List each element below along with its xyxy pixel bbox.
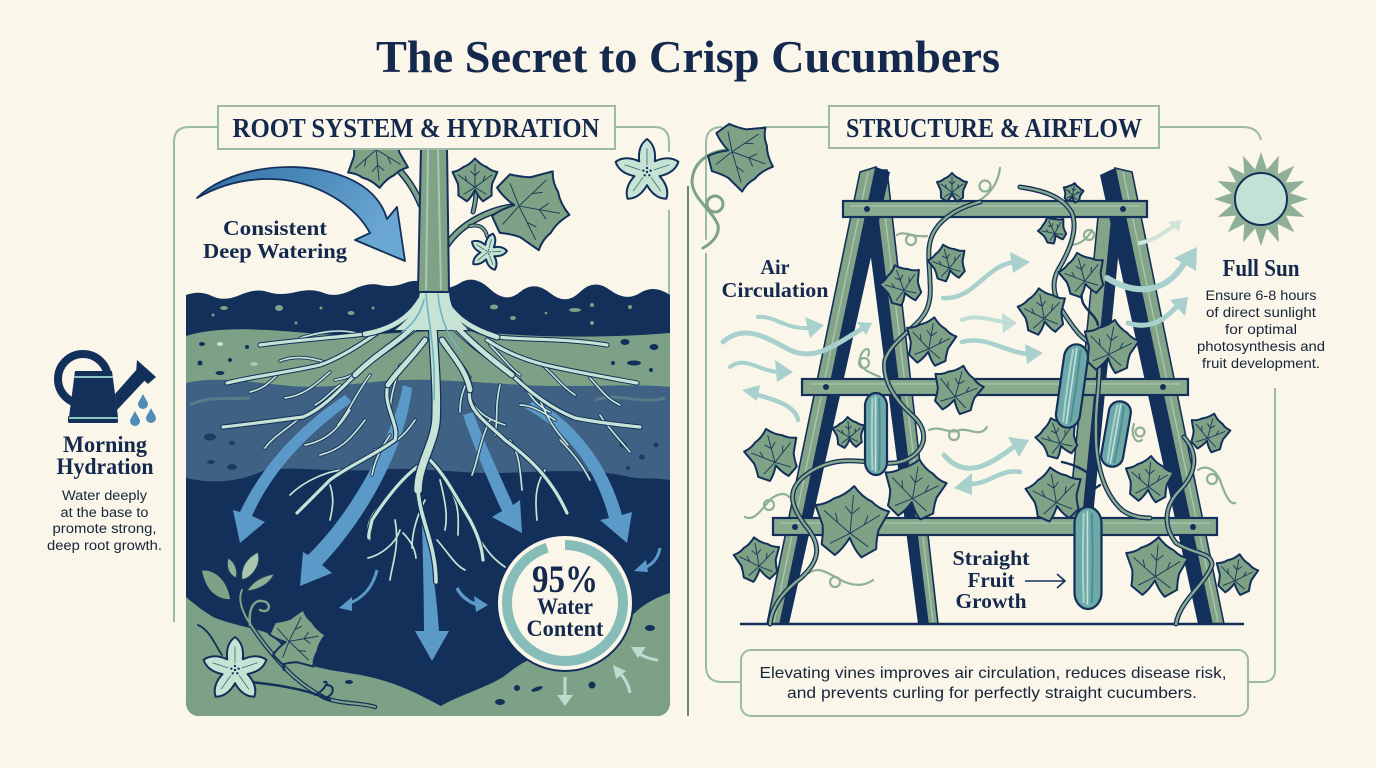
taproot — [395, 292, 468, 582]
main stem — [418, 148, 449, 292]
cucumber — [1054, 343, 1090, 429]
left A-frame outer leg — [780, 167, 890, 624]
heading: full sun: Full Sun — [1222, 256, 1300, 282]
stem highlight — [426, 150, 441, 290]
leaf — [1062, 181, 1085, 204]
leaf — [1212, 551, 1260, 597]
label: straight fruit growth: Growth — [956, 589, 1027, 613]
label: straight fruit growth: Straight — [952, 546, 1030, 570]
vine outlines — [770, 187, 1212, 624]
text: full sun description: fruit development. — [1202, 355, 1320, 371]
air arrow — [954, 471, 1020, 495]
air arrow — [730, 360, 793, 382]
corner vine — [692, 150, 727, 248]
lower soil stones — [345, 625, 655, 705]
leaf — [1034, 211, 1071, 247]
bottom-left vine decoration — [198, 552, 375, 707]
callout text — [526, 558, 604, 641]
heading: structure and airflow — [829, 106, 1159, 148]
panel: structure and airflow — [692, 106, 1325, 716]
heading: morning hydration: Morning — [63, 432, 147, 457]
air arrow — [1140, 220, 1181, 243]
cucumber — [865, 393, 887, 475]
air circulation arrows — [723, 220, 1197, 495]
vines — [770, 187, 1212, 624]
leaf: large right — [488, 162, 576, 254]
title: The Secret to Crisp Cucumbers — [376, 32, 1000, 82]
label: consistent deep watering: Consistent — [223, 216, 327, 240]
label: air circulation: Circulation — [722, 278, 829, 302]
plant branches — [392, 163, 522, 245]
thick root bases outline — [355, 300, 512, 390]
trellis — [740, 167, 1244, 624]
text: morning hydration description: deep root growth. — [47, 538, 162, 553]
leaf — [1055, 247, 1111, 301]
soil patches and stones — [190, 303, 665, 470]
leaf — [1123, 454, 1175, 504]
text: full sun description: Ensure 6-8 hours — [1206, 287, 1316, 303]
green soil layer — [186, 329, 670, 390]
cucumbers — [865, 343, 1133, 609]
air arrow — [943, 252, 1030, 298]
heading: root system and hydration: ROOT SYSTEM & HYDRATION — [232, 113, 600, 143]
text: morning hydration description: at the base to — [60, 505, 148, 520]
text: full sun description: of direct sunlight — [1206, 304, 1316, 320]
right A-frame inner leg — [1082, 217, 1122, 527]
plant above ground — [345, 128, 576, 292]
fine roots outline — [250, 331, 630, 580]
bottom crossbar — [773, 518, 1217, 535]
small oval leaves — [201, 570, 231, 600]
leaf — [927, 359, 988, 418]
text: full sun description — [1197, 287, 1325, 371]
central divider — [687, 186, 689, 716]
label: air circulation: Air — [760, 255, 790, 279]
leaf — [832, 416, 866, 449]
water arrow 1 — [233, 395, 352, 543]
cucumber: straight fruit — [1074, 507, 1102, 609]
leaf — [811, 483, 891, 559]
air arrow — [1107, 247, 1197, 289]
leaf — [1079, 315, 1142, 376]
air arrow — [962, 340, 1043, 364]
text: full sun description: for optimal — [1225, 321, 1297, 337]
leaf — [1185, 409, 1233, 456]
water arrow 4 — [463, 412, 522, 533]
leaf: bottom vine — [266, 606, 331, 673]
air arrow — [723, 322, 872, 354]
note box: benefits of trellising: and prevents curling for perfectly straight cucumbers. — [787, 685, 1197, 702]
label: air circulation — [722, 255, 829, 302]
main roots outline — [223, 307, 640, 560]
text: morning hydration description: promote strong, — [52, 521, 156, 536]
water arrow 2 — [300, 385, 412, 586]
callout text: Content — [526, 616, 604, 641]
root system — [223, 292, 640, 582]
water flow arrows in soil — [233, 385, 660, 706]
top dark soil layer — [186, 280, 670, 720]
soil cross-section — [186, 280, 670, 720]
text: full sun description: photosynthesis and — [1197, 338, 1325, 354]
vine stems — [198, 590, 375, 707]
leaf — [1015, 284, 1070, 337]
main roots fill — [223, 307, 640, 560]
panel: morning hydration sidebar — [47, 354, 162, 553]
progress ring — [507, 545, 623, 661]
leaf — [731, 533, 784, 584]
leaf: small right — [452, 158, 498, 201]
cucumber — [1099, 400, 1133, 468]
leaf: behind heading — [345, 128, 410, 191]
leaf — [1123, 534, 1190, 598]
air arrow — [758, 317, 824, 338]
middle crossbar — [802, 379, 1188, 395]
bottom green soil — [186, 593, 670, 720]
leaf — [740, 422, 805, 485]
text: morning hydration description — [47, 488, 162, 553]
arrow: to straight fruit — [1025, 574, 1065, 588]
air arrow — [944, 437, 1029, 468]
tendrils — [745, 168, 1235, 587]
heading: morning hydration — [56, 432, 154, 479]
consistent deep watering arrow — [197, 167, 405, 261]
left A-frame inner leg — [870, 215, 928, 624]
ground line — [740, 623, 1244, 625]
label: consistent deep watering: Deep Watering — [203, 239, 348, 263]
leaf — [937, 173, 967, 202]
small water arrows — [339, 548, 660, 706]
flower: bottom left — [204, 637, 266, 697]
panel frame — [706, 127, 1275, 682]
callout: 95 percent water content — [497, 535, 633, 671]
mid blue soil layer — [186, 380, 670, 481]
callout text: 95% — [532, 558, 598, 601]
text: morning hydration description: Water deeply — [62, 488, 147, 503]
leaf — [901, 313, 959, 368]
label: straight fruit growth — [952, 546, 1030, 613]
panel frame — [174, 127, 669, 622]
heading: structure and airflow: STRUCTURE & AIRFLOW — [846, 113, 1142, 143]
fine roots fill — [250, 331, 630, 580]
heading: root system and hydration — [218, 106, 615, 149]
label: straight fruit growth: Fruit — [968, 568, 1015, 592]
leaf — [875, 258, 928, 310]
icon: watering can — [58, 354, 156, 426]
callout text: Water — [537, 594, 593, 619]
leaf — [1031, 411, 1084, 463]
leaf — [925, 240, 971, 284]
bud flower — [467, 229, 510, 272]
label: consistent deep watering — [203, 216, 348, 263]
air arrow — [1128, 297, 1188, 325]
leaf — [1023, 463, 1087, 525]
heading: morning hydration: Hydration — [56, 454, 154, 479]
icon: sun — [1214, 152, 1308, 246]
leaf: corner — [701, 113, 785, 199]
thick root bases fill — [355, 300, 512, 390]
air arrow — [742, 385, 798, 420]
icon: corner flower — [616, 139, 678, 199]
vine fills — [770, 187, 1212, 624]
air arrow — [962, 313, 1017, 333]
note box: benefits of trellising: Elevating vines improves air circulation, reduces disease risk, — [760, 665, 1226, 682]
water arrow 3 — [415, 523, 449, 661]
trellis leaves — [731, 173, 1260, 598]
top crossbar — [843, 201, 1147, 217]
note box: benefits of trellising — [741, 650, 1248, 716]
leaf — [879, 454, 950, 523]
right A-frame outer leg — [1100, 168, 1212, 624]
water arrow 5 — [525, 400, 632, 543]
panel: root system and hydration — [174, 106, 678, 720]
